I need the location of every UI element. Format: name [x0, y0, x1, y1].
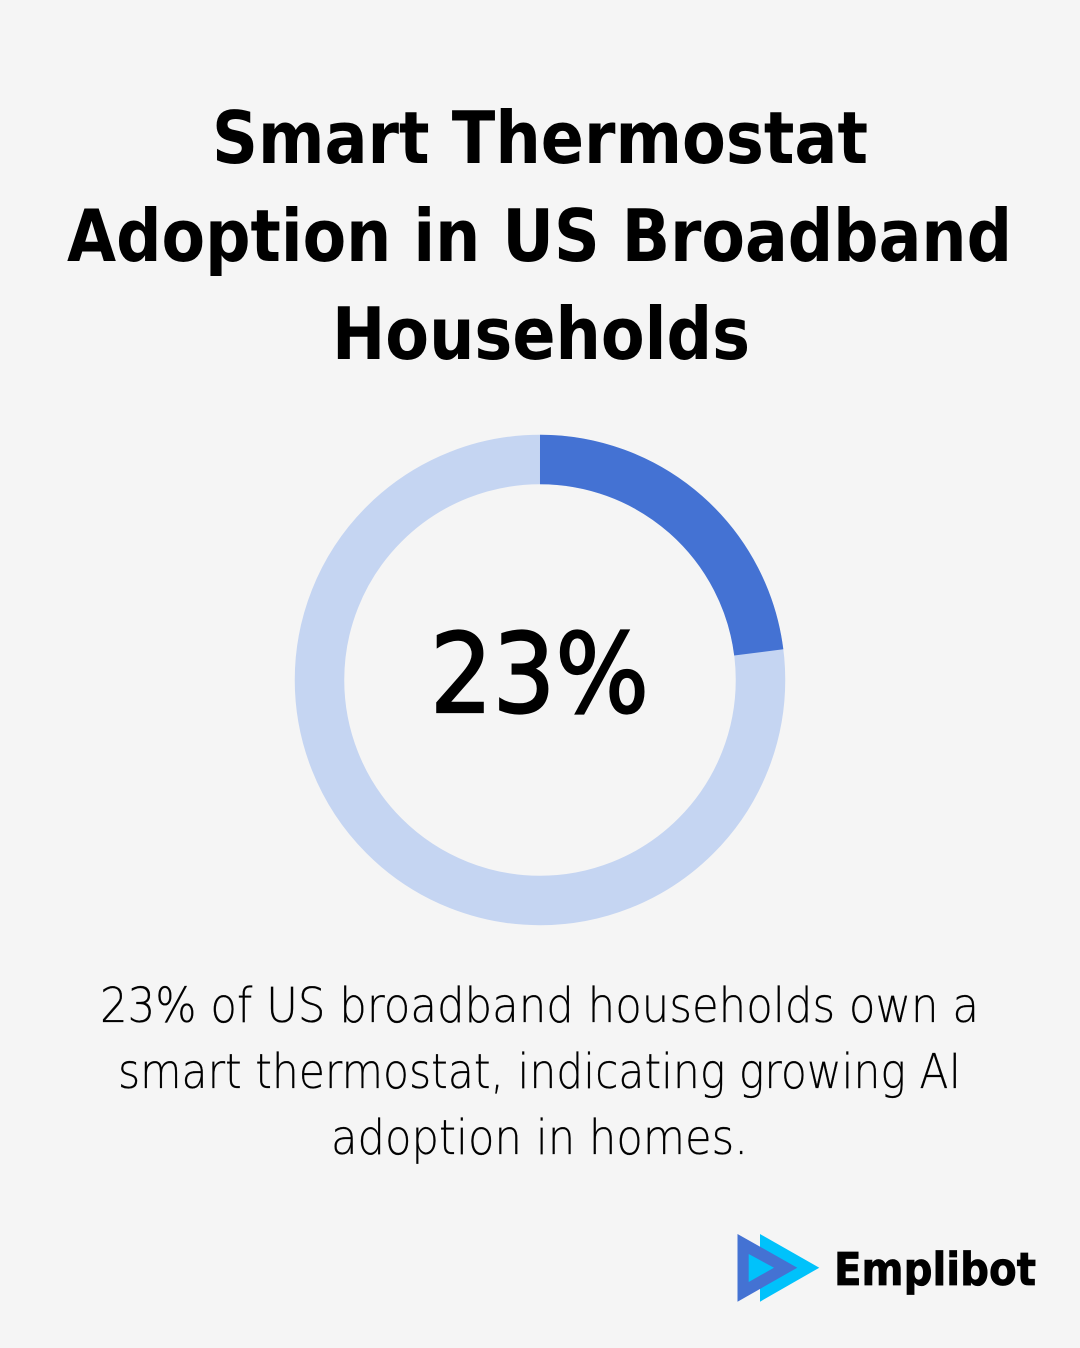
description text: smart thermostat, indicating growing AI: [118, 1044, 961, 1100]
icon: play triangles: [738, 1234, 819, 1302]
center value: 23%: [430, 610, 649, 738]
logo wordmark: Emplibot: [834, 1243, 1036, 1296]
description text: adoption in homes.: [331, 1110, 748, 1166]
donut track: [320, 460, 760, 900]
description text: 23% of US broadband households own a: [100, 978, 979, 1034]
description text: [100, 978, 979, 1166]
title: Smart Thermostat: [212, 96, 868, 180]
donut chart: 23%: [320, 460, 760, 900]
title: Households: [332, 292, 750, 376]
title: [67, 96, 1012, 376]
donut value segment: [540, 460, 759, 652]
logo: Emplibot: [738, 1234, 1036, 1302]
